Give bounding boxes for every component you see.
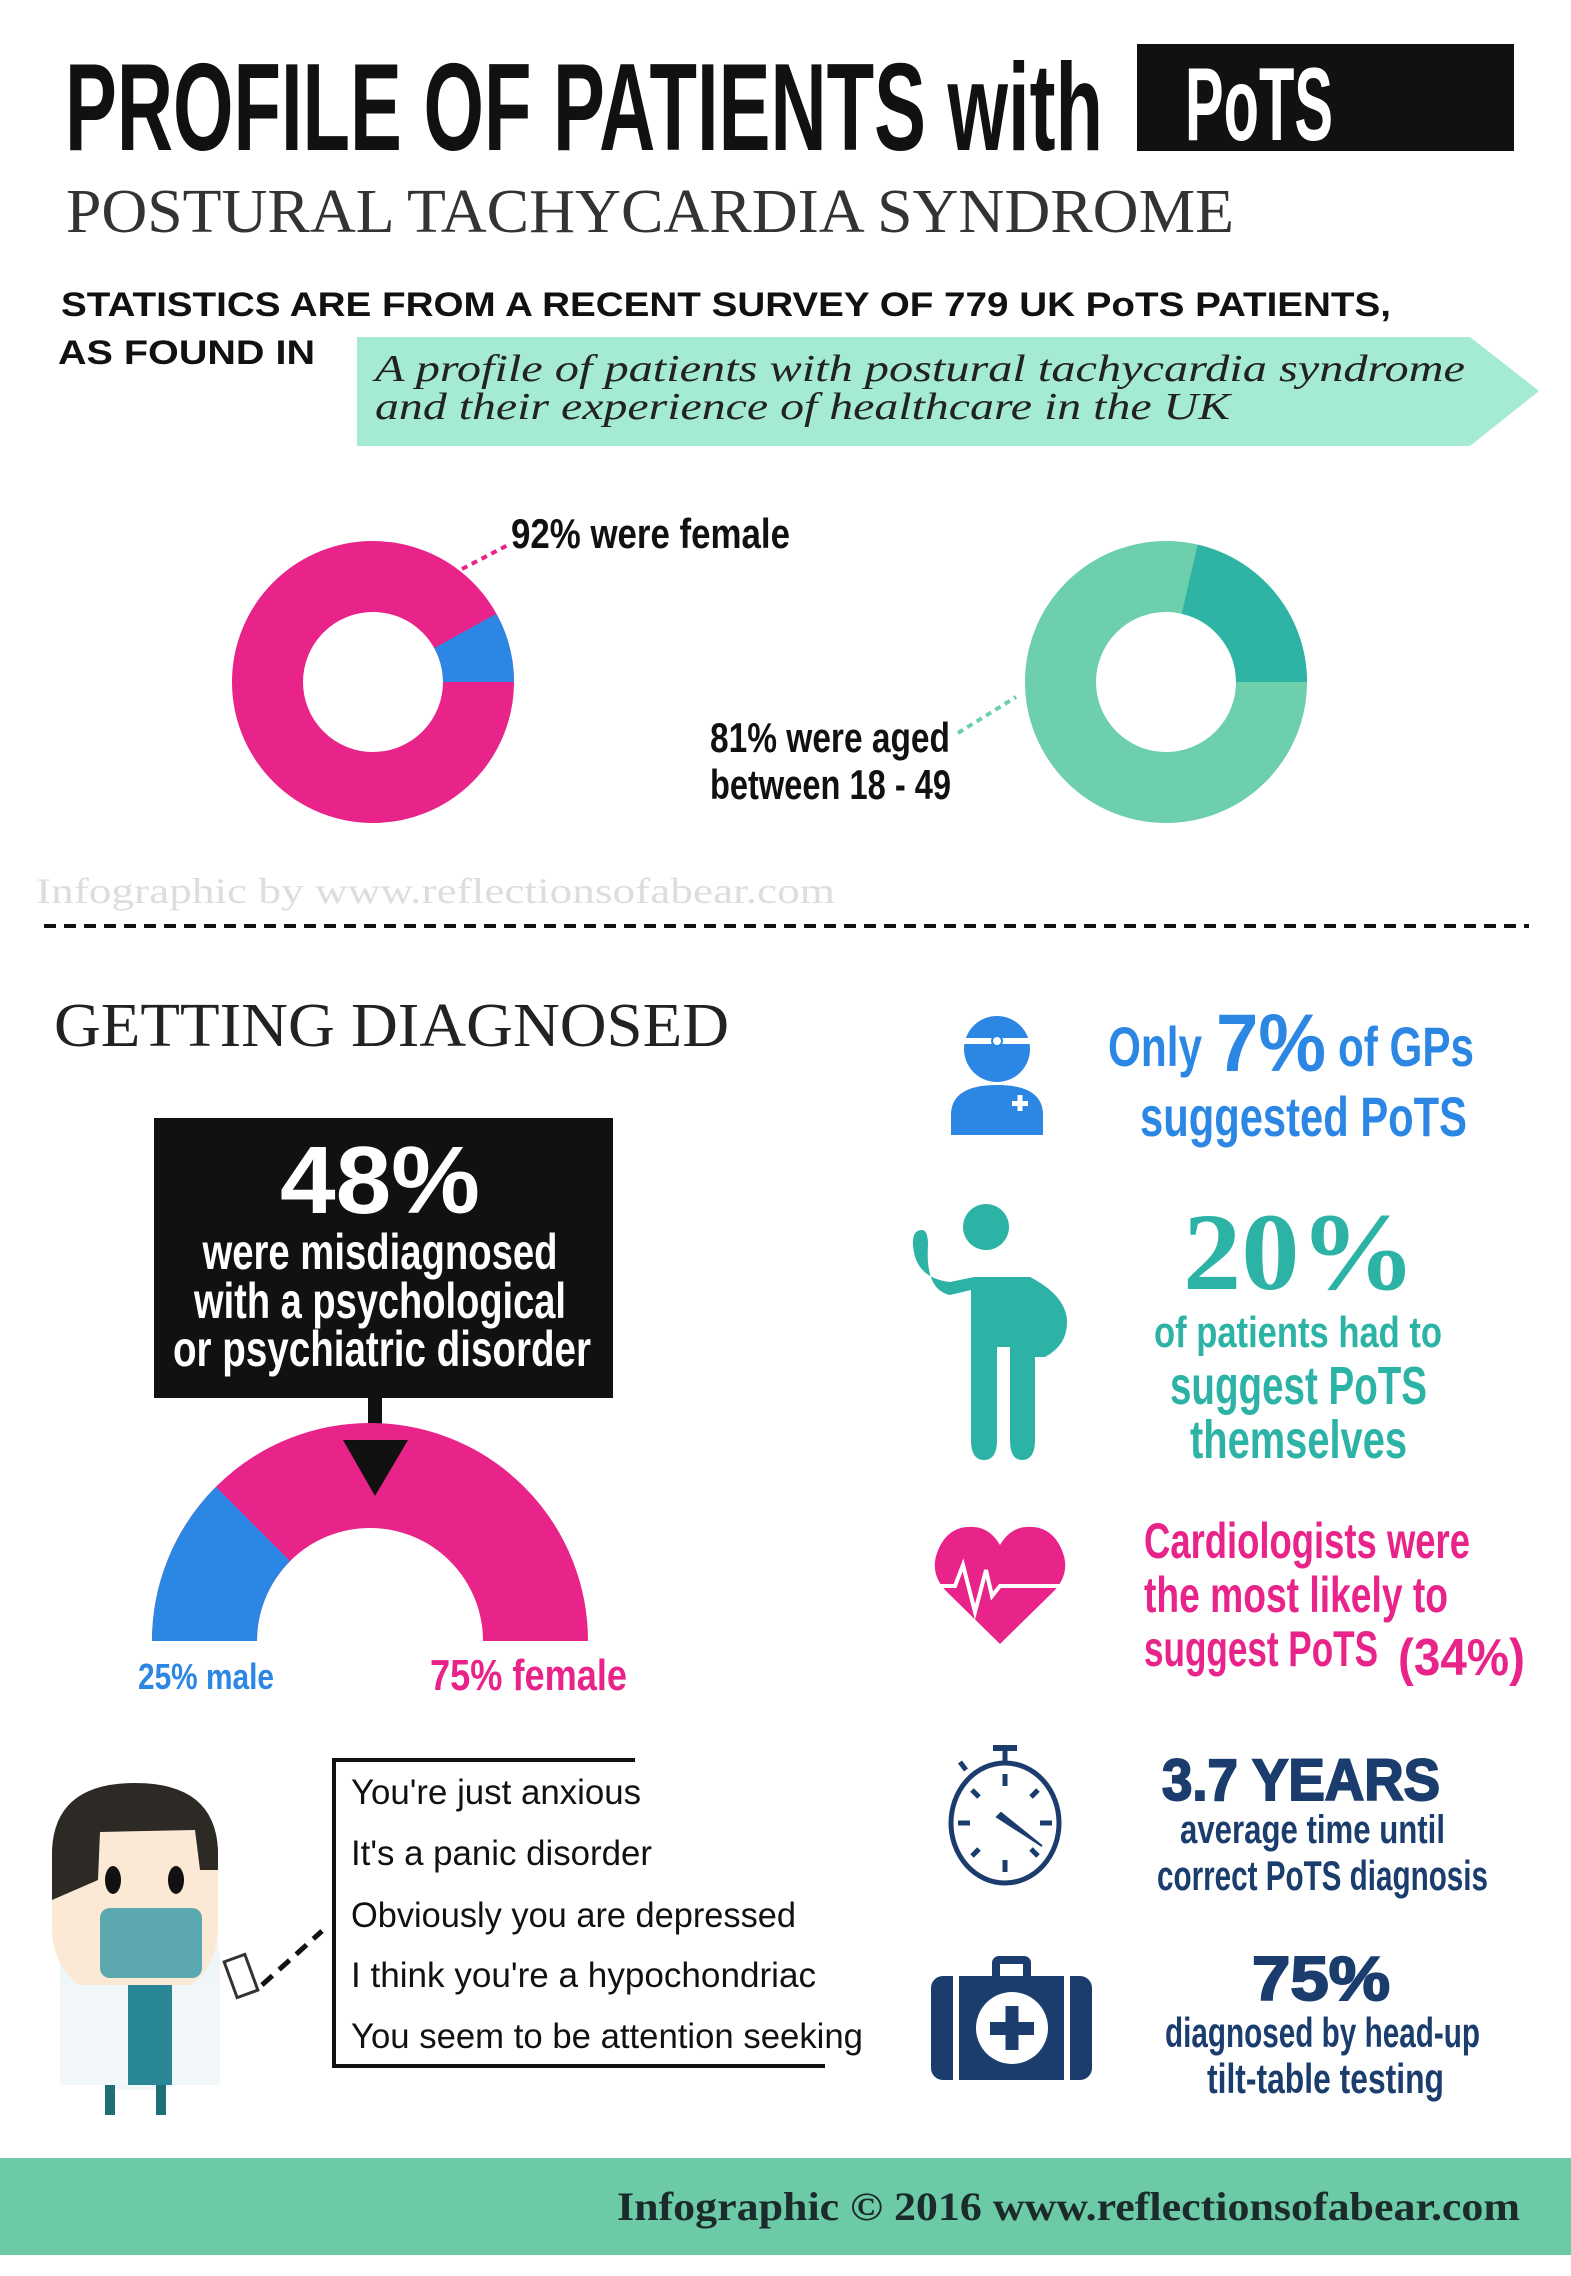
stat: GPs: suggested PoTS bbox=[1140, 1085, 1467, 1148]
quote box: dismissive comments: You're just anxious bbox=[351, 1773, 641, 1812]
quote box: dismissive comments: It's a panic disorder bbox=[351, 1834, 652, 1873]
half donut: gender of misdiagnosed: 25% male bbox=[138, 1656, 274, 1697]
arrow down bbox=[343, 1396, 408, 1496]
banner: paper title arrow bbox=[357, 337, 1539, 446]
misdiagnosis box: were misdiagnosed bbox=[202, 1224, 558, 1280]
half donut: gender of misdiagnosed: 75% female bbox=[430, 1651, 627, 1700]
heading: getting diagnosed: GETTING DIAGNOSED bbox=[54, 992, 729, 1060]
donut chart: age bbox=[710, 576, 1272, 808]
stat: cardiologists: (34%) bbox=[1398, 1629, 1525, 1687]
quote box: dismissive comments: Obviously you are depressed bbox=[351, 1896, 796, 1935]
stat: 75% tilt-table: 75% bbox=[1252, 1945, 1390, 2014]
quote box: dismissive comments bbox=[334, 1760, 863, 2066]
stat: 3.7 years: 3.7 YEARS bbox=[1162, 1748, 1440, 1813]
misdiagnosis box: with a psychological bbox=[193, 1273, 566, 1329]
survey source text: STATISTICS ARE FROM A RECENT SURVEY OF 779 UK PoTS PATIENTS, bbox=[61, 286, 1391, 324]
stat: 75% tilt-table bbox=[1165, 1945, 1480, 2102]
survey source text: AS FOUND IN bbox=[58, 334, 315, 372]
icon: stopwatch bbox=[951, 1748, 1059, 1883]
footer band bbox=[0, 2158, 1571, 2255]
donut chart: gender: 92% were female bbox=[511, 510, 790, 557]
icon: medical kit bbox=[931, 1960, 1092, 2080]
misdiagnosis box: 48% bbox=[280, 1127, 480, 1234]
icon: person bbox=[913, 1204, 1067, 1460]
stat: cardiologists: suggest PoTS bbox=[1144, 1621, 1378, 1677]
quote box: dismissive comments: I think you're a hypochondriac bbox=[351, 1956, 816, 1995]
subtitle: POSTURAL TACHYCARDIA SYNDROME bbox=[66, 178, 1234, 246]
donut chart: gender bbox=[268, 510, 790, 788]
stat: cardiologists: the most likely to bbox=[1144, 1567, 1448, 1623]
misdiagnosis box: or psychiatric disorder bbox=[173, 1321, 591, 1377]
icon: heart bbox=[935, 1527, 1065, 1644]
donut chart: age: 81% were aged bbox=[710, 714, 950, 761]
banner: paper title arrow: and their experience of healthcare in the UK bbox=[375, 386, 1232, 428]
survey source text bbox=[58, 286, 1391, 372]
watermark: Infographic by www.reflectionsofabear.com bbox=[36, 871, 835, 911]
stat: GPs: Only bbox=[1108, 1015, 1202, 1078]
stat: GPs: 7% bbox=[1216, 998, 1326, 1089]
stat: 20% self-suggested: suggest PoTS bbox=[1170, 1356, 1427, 1416]
stat: 20% self-suggested: of patients had to bbox=[1154, 1308, 1442, 1357]
misdiagnosis box bbox=[154, 1118, 613, 1398]
stat: 3.7 years bbox=[1157, 1748, 1488, 1899]
icon: GP doctor bbox=[951, 1016, 1043, 1135]
banner: paper title arrow: A profile of patients with postural tachycardia syndrome bbox=[371, 348, 1465, 390]
stat: 3.7 years: average time until bbox=[1180, 1808, 1445, 1852]
stat: GPs bbox=[1108, 998, 1474, 1148]
footer band: Infographic © 2016 www.reflectionsofabear.com bbox=[617, 2184, 1520, 2229]
doctor illustration bbox=[52, 1783, 322, 2115]
stat: 20% self-suggested: themselves bbox=[1190, 1410, 1407, 1470]
stat: 20% self-suggested bbox=[1154, 1191, 1442, 1470]
title: PoTS bbox=[1185, 47, 1333, 163]
quote box: dismissive comments: You seem to be attention seeking bbox=[351, 2017, 863, 2056]
stat: GPs: of GPs bbox=[1338, 1015, 1474, 1078]
stat: cardiologists bbox=[1144, 1513, 1525, 1687]
donut chart: age: between 18 - 49 bbox=[710, 761, 951, 808]
half donut: gender of misdiagnosed bbox=[138, 1440, 627, 1700]
stat: 75% tilt-table: tilt-table testing bbox=[1207, 2055, 1444, 2102]
stat: 20% self-suggested: 20% bbox=[1183, 1191, 1416, 1313]
